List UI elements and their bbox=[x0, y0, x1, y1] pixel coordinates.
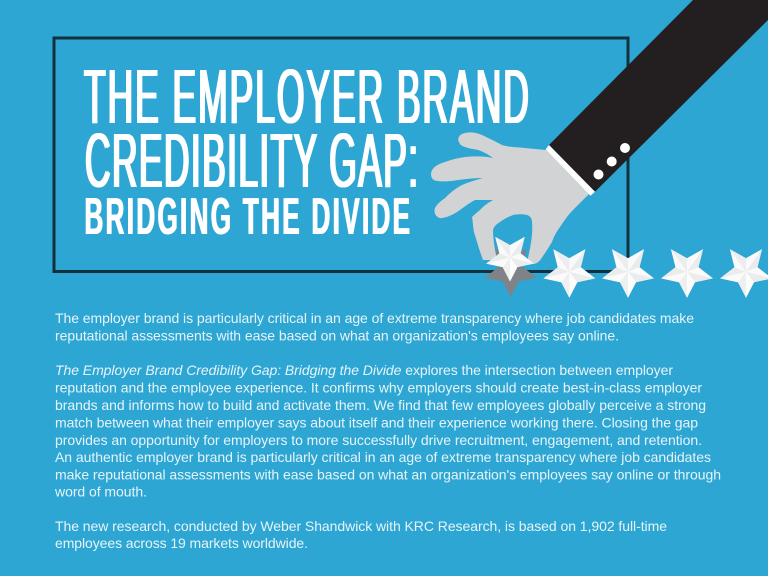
title line 1: THE EMPLOYER BRAND bbox=[83, 54, 528, 140]
paragraph 2: The Employer Brand Credibility Gap: Bridging the Divide explores the intersection between employer bbox=[55, 362, 673, 378]
paragraph 2: reputation and the employee experience. It confirms why employers should create best-in-class employer bbox=[55, 380, 702, 396]
icon: hand and sleeve bbox=[431, 0, 768, 264]
paragraph 2: An authentic employer brand is particularly critical in an age of extreme transparency where job candidates bbox=[55, 449, 711, 465]
paragraph 2: brands and informs how to build and activate them. We find that few employees globally perceive a strong bbox=[55, 397, 706, 413]
paragraph 1: reputational assessments with ease based on what an organization's employees say online. bbox=[55, 328, 619, 344]
icon: star 2 bbox=[602, 249, 654, 298]
sleeve bbox=[549, 0, 768, 192]
title line 2: CREDIBILITY GAP: bbox=[84, 118, 417, 204]
icon: grey shadow star bbox=[485, 249, 537, 297]
icon: star 1 bbox=[543, 249, 595, 298]
title line 3: BRIDGING THE DIVIDE bbox=[84, 187, 410, 245]
cuff bbox=[546, 145, 595, 196]
hand bbox=[431, 132, 590, 264]
title frame bbox=[54, 38, 628, 272]
paragraph 3: The new research, conducted by Weber Shandwick with KRC Research, is based on 1,902 full-time bbox=[55, 518, 667, 534]
paragraph 2: make reputational assessments with ease based on what an organization's employees say online or through bbox=[55, 466, 721, 482]
icon: held star bbox=[486, 237, 534, 281]
paragraph 2: match between what their employer says about itself and their experience working there. Closing the gap bbox=[55, 414, 698, 430]
paragraph 1 bbox=[55, 310, 694, 344]
title bbox=[83, 54, 528, 245]
icon: star 4 bbox=[720, 249, 768, 298]
paragraph 2 bbox=[54, 362, 721, 500]
paragraph 3: employees across 19 markets worldwide. bbox=[55, 535, 308, 551]
icon: star 3 bbox=[661, 249, 713, 298]
paragraph 2: provides an opportunity for employers to more successfully drive recruitment, engagement, and retention. bbox=[55, 432, 702, 448]
paragraph 3 bbox=[55, 518, 667, 551]
paragraph 1: The employer brand is particularly critical in an age of extreme transparency where job candidates make bbox=[55, 310, 694, 326]
paragraph 2: word of mouth. bbox=[54, 484, 147, 500]
buttons bbox=[594, 143, 630, 180]
